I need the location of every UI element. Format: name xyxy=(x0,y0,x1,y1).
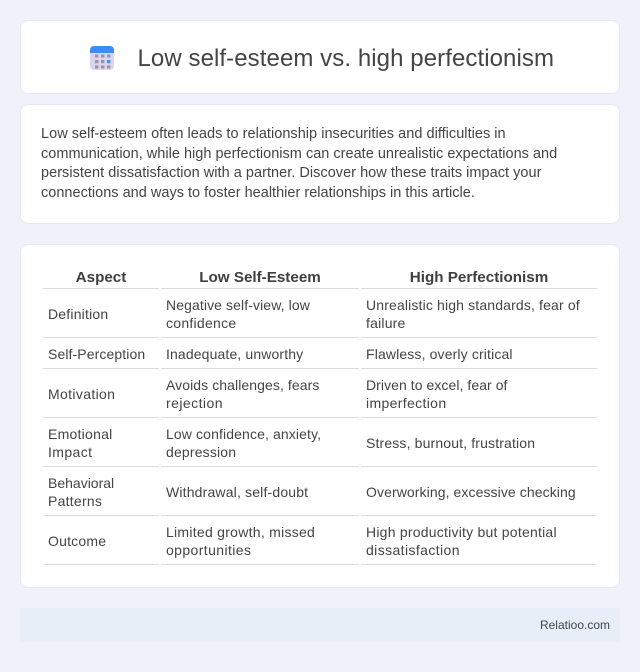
title panel xyxy=(20,20,620,94)
row: emotional impact: depression xyxy=(166,444,236,460)
footer xyxy=(20,608,620,642)
row: emotional impact xyxy=(48,426,535,460)
text: persistent dissatisfaction with a partner. Discover how these traits impact your xyxy=(41,165,541,181)
row: outcome xyxy=(48,524,557,558)
row: outcome: dissatisfaction xyxy=(366,542,460,558)
row: motivation: imperfection xyxy=(366,395,446,411)
row: behavioral patterns: Patterns xyxy=(48,493,102,509)
row: emotional impact: Low confidence, anxiety, xyxy=(166,426,321,442)
row: definition: Negative self-view, low xyxy=(166,297,310,313)
text: connections and ways to foster healthier relationships in this article. xyxy=(41,185,475,201)
footer credit: Relatioo.com xyxy=(540,618,610,632)
row: self-perception: Inadequate, unworthy xyxy=(166,346,303,362)
row: motivation: Motivation xyxy=(48,386,115,402)
text: Low self-esteem often leads to relationship insecurities and difficulties in xyxy=(41,126,506,142)
row: definition xyxy=(48,297,580,331)
row: outcome: Limited growth, missed xyxy=(166,524,315,540)
row: behavioral patterns: Withdrawal, self-doubt xyxy=(166,484,308,500)
row: definition: confidence xyxy=(166,315,236,331)
comparison table xyxy=(43,269,597,565)
row: outcome: opportunities xyxy=(166,542,251,558)
row: emotional impact: Stress, burnout, frustration xyxy=(366,435,535,451)
intro text panel xyxy=(20,104,620,224)
table header xyxy=(76,269,548,286)
row: motivation xyxy=(48,377,508,411)
row: definition: failure xyxy=(366,315,406,331)
row: self-perception xyxy=(48,346,513,362)
row: outcome: High productivity but potential xyxy=(366,524,557,540)
text: communication, while high perfectionism can create unrealistic expectations and xyxy=(41,146,557,162)
table header: Aspect xyxy=(76,269,126,286)
table header: High Perfectionism xyxy=(410,269,548,286)
row: self-perception: Self-Perception xyxy=(48,346,145,362)
row: definition: Unrealistic high standards, fear of xyxy=(366,297,580,313)
comparison table panel xyxy=(20,244,620,588)
table header: Low Self-Esteem xyxy=(199,269,321,286)
row: emotional impact: Impact xyxy=(48,444,92,460)
row: behavioral patterns: Behavioral xyxy=(48,475,114,491)
row: self-perception: Flawless, overly critical xyxy=(366,346,513,362)
row: outcome: Outcome xyxy=(48,533,106,549)
row: motivation: Avoids challenges, fears xyxy=(166,377,319,393)
row: emotional impact: Emotional xyxy=(48,426,113,442)
row: behavioral patterns xyxy=(48,475,576,509)
row: motivation: rejection xyxy=(166,395,223,411)
icon: calendar xyxy=(90,46,114,70)
heading: Low self-esteem vs. high perfectionism xyxy=(138,45,554,72)
row: motivation: Driven to excel, fear of xyxy=(366,377,508,393)
intro text xyxy=(41,126,557,201)
row: definition: Definition xyxy=(48,306,108,322)
row: behavioral patterns: Overworking, excessive checking xyxy=(366,484,576,500)
